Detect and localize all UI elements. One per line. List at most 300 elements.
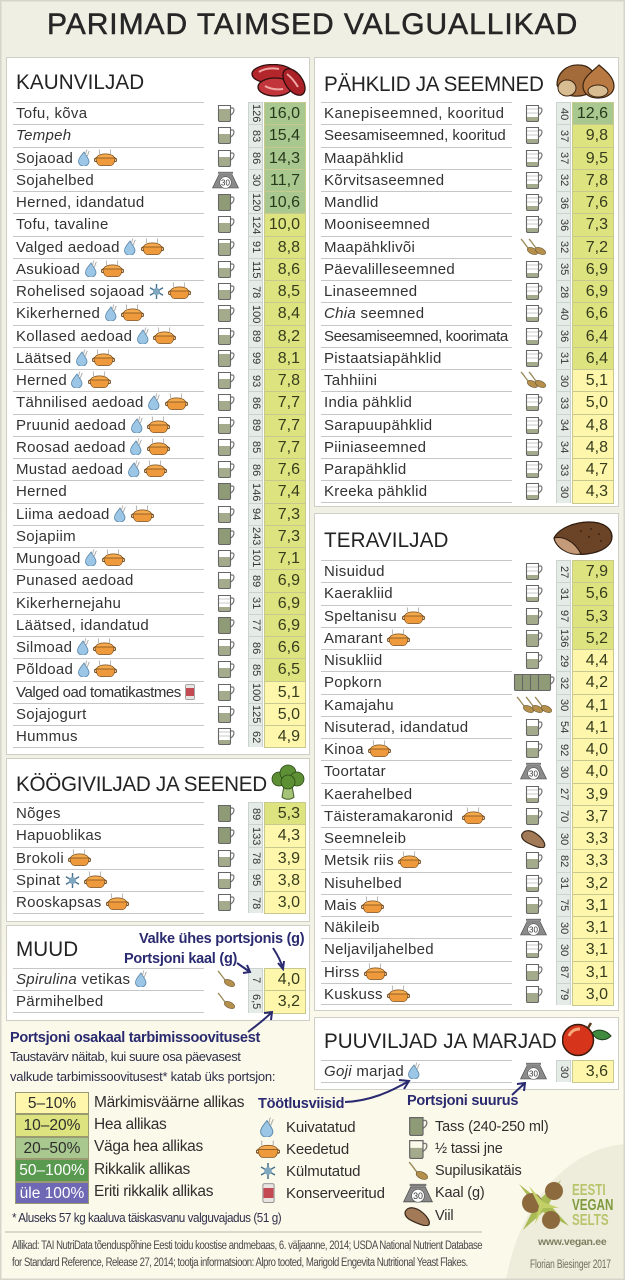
- row: Rohelised sojaoad: [13, 280, 306, 302]
- row: Täisteramakaronid: Täisteramakaronid: [324, 808, 453, 825]
- website: www.vegan.ee: [538, 1236, 606, 1248]
- row: Sojaoad: 14,3: [269, 150, 300, 166]
- panel: teraviljad: [315, 514, 618, 1010]
- row: Herned keedetud: Herned: [16, 372, 67, 389]
- title: PARIMAD TAIMSED VALGUALLIKAD: [47, 8, 578, 41]
- row: Chia seemned: [321, 302, 614, 324]
- row: Piiniaseemned: 34: [558, 441, 570, 454]
- row: Nõges: 5,3: [278, 805, 300, 822]
- row: Maapähklivõi: [321, 236, 614, 258]
- row: Kuskuss: Kuskuss: [324, 986, 383, 1003]
- row: Maapähklivõi: 7,2: [586, 238, 608, 256]
- panel: puuviljad ja marjad: [315, 1018, 618, 1089]
- logo text: [572, 1184, 613, 1228]
- row: Maapähklivõi: 32: [558, 241, 570, 253]
- row: Pistaatsiapähklid: 6,4: [586, 350, 608, 367]
- row: Valged aedoad: 8,8: [278, 238, 300, 256]
- row: Mooniseemned: 7,3: [586, 216, 608, 233]
- heading: kaunviljad: KAUNVILJAD: [16, 70, 144, 94]
- swatch 10–20%: 10–20%: [24, 1117, 80, 1134]
- row: Täisteramakaronid: [321, 805, 614, 827]
- row: Seemneleib: 3,3: [586, 830, 608, 847]
- label: Supilusikatäis: Supilusikatäis: [435, 1163, 522, 1179]
- row: Chia seemned: 6,6: [586, 305, 608, 322]
- row: Tofu, kõva: Tofu, kõva: [16, 105, 87, 122]
- swatch 20–50%: 20–50%: [24, 1140, 80, 1157]
- row: Kinoa: Kinoa: [324, 741, 364, 758]
- row: Põldoad: 85: [250, 664, 262, 676]
- row: Speltanisu: Speltanisu: [324, 608, 397, 624]
- row: Toortatar: 30: [558, 766, 570, 778]
- row: Kamajahu: Kamajahu: [324, 696, 394, 714]
- heading: teraviljad: TERAVILJAD: [324, 528, 448, 552]
- icon: canned: [262, 1183, 275, 1203]
- row: Kikerherned: 8,4: [278, 305, 300, 322]
- label: Konserveeritud: Konserveeritud: [286, 1185, 385, 1202]
- row: Sojaoad: Sojaoad: [16, 150, 73, 166]
- row: Liima aedoad: Liima aedoad: [16, 506, 110, 522]
- row: Mandlid: 7,6: [586, 194, 608, 211]
- heading: portsjoni suurus: Portsjoni suurus: [407, 1093, 518, 1109]
- row: Maapähklid: 37: [558, 152, 570, 164]
- row: Kinoa: 92: [558, 744, 570, 756]
- row: Tempeh: 83: [250, 130, 262, 142]
- icon: tablespoon: [408, 1161, 428, 1181]
- legend: processing methods: [255, 1115, 390, 1207]
- row: Mais: Mais: [324, 897, 357, 914]
- row: Hummus: 4,9: [278, 728, 300, 745]
- row: Läätsed, idandatud: 6,9: [278, 617, 300, 634]
- row: Asukioad: Asukioad: [16, 261, 80, 278]
- row: Maapähklid: 9,5: [586, 150, 608, 166]
- row: Kikerhernejahu: [13, 592, 306, 614]
- row: Hapuoblikas: [13, 824, 306, 847]
- row: Metsik riis: Metsik riis: [324, 852, 394, 869]
- row: Rooskapsas: 3,0: [278, 894, 300, 911]
- row: Chia seemned: Chia seemned: [324, 305, 424, 322]
- row: Kreeka pähklid: 30: [558, 486, 570, 498]
- row: Läätsed: 99: [250, 352, 262, 364]
- row: Valged oad tomatikastmes: 100: [250, 683, 262, 701]
- text: legend explanation: Taustavärv näitab, kui suure osa päevasest: [10, 1049, 240, 1064]
- heading: köögiviljad ja seened: KÖÖGIVILJAD JA SEENED: [16, 772, 267, 796]
- row: Seemneleib: [321, 827, 614, 849]
- row: Asukioad: 115: [250, 261, 262, 278]
- row: Seesamiseemned, kooritud: [321, 124, 614, 146]
- row: Kanepiseemned, kooritud: Kanepiseemned, kooritud: [324, 105, 504, 122]
- swatch 50–100%: 50–100%: [19, 1162, 85, 1179]
- row: Läätsed: 8,1: [278, 350, 300, 367]
- background blob: [500, 1140, 625, 1280]
- icon: dried: [260, 1117, 274, 1137]
- row: Kaerakliid: 5,6: [586, 585, 608, 602]
- row: Rohelised sojaoad: 78: [250, 286, 262, 298]
- row: Pistaatsiapähklid: [321, 347, 614, 369]
- row: Põldoad: 6,5: [278, 661, 300, 678]
- row: Kaerakliid: 31: [558, 588, 570, 600]
- sources: [12, 1238, 482, 1271]
- row: Piiniaseemned: 4,8: [586, 439, 608, 456]
- logo text: EESTI: [572, 1182, 606, 1199]
- row: Sarapuupähklid: 34: [558, 419, 570, 431]
- row: Linaseemned: Linaseemned: [324, 283, 417, 300]
- row: Kõrvitsaseemned: 32: [558, 174, 570, 186]
- row: Spinat: [13, 869, 306, 891]
- row: Sojapiim: [13, 525, 306, 547]
- row: Tähnilised aedoad: Tähnilised aedoad: [16, 394, 144, 411]
- row: Mais: [321, 894, 614, 916]
- row: Spinat: Spinat: [16, 872, 60, 889]
- label: valke ühes portsjonis: Valke ühes portsjonis (g): [139, 931, 304, 947]
- row: Neljaviljahelbed: 3,1: [586, 941, 608, 958]
- row: Kaerahelbed: [321, 782, 614, 805]
- row: Kõrvitsaseemned: Kõrvitsaseemned: [324, 172, 444, 189]
- row: Mungoad: 7,1: [278, 550, 300, 567]
- row: Nõges: 89: [250, 808, 262, 820]
- row: Goji marjad: 30: [558, 1066, 570, 1078]
- row: Päevalilleseemned: 35: [558, 263, 570, 276]
- row: Sarapuupähklid: [321, 414, 614, 436]
- row: Silmoad: [13, 636, 306, 658]
- row: Pruunid aedoad: Pruunid aedoad: [16, 416, 126, 434]
- row: Speltanisu: 5,3: [586, 608, 608, 624]
- row: Mooniseemned: 36: [558, 219, 570, 231]
- row: Nisuhelbed: 3,2: [586, 874, 608, 892]
- icon: apple: [562, 1021, 612, 1057]
- row: Tofu, kõva: [13, 102, 306, 124]
- row: Pärmihelbed: Pärmihelbed: [16, 993, 104, 1010]
- icon: beans: [251, 64, 306, 97]
- heading: muud: MUUD: [16, 937, 78, 961]
- row: Tähnilised aedoad: [13, 391, 306, 414]
- label: Kuivatatud: Kuivatatud: [286, 1119, 355, 1136]
- row: Tahhiini: Tahhiini: [324, 372, 377, 389]
- icon: cup: [408, 1116, 428, 1136]
- logo text: VEGAN: [572, 1197, 613, 1214]
- row: Spinat: 3,8: [278, 872, 300, 889]
- row: Tempeh: [13, 124, 306, 147]
- icon: hazelnuts: [556, 64, 615, 99]
- row: Kanepiseemned, kooritud: 40: [558, 108, 570, 120]
- row: Päevalilleseemned: 6,9: [586, 261, 608, 278]
- row: Valged oad tomatikastmes: [13, 681, 306, 703]
- row: Näkileib: Näkileib: [324, 919, 380, 936]
- credit: Florian Biesinger 2017: [530, 1259, 611, 1271]
- row: Neljaviljahelbed: [321, 938, 614, 960]
- row: Kamajahu: 30: [558, 699, 570, 711]
- footnote: * Aluseks 57 kg kaaluva täiskasvanu valguvajadus (51 g): [12, 1210, 281, 1225]
- row: Nisuhelbed: [321, 872, 614, 894]
- row: Sojajogurt: Sojajogurt: [16, 706, 87, 723]
- row: Hapuoblikas: 4,3: [278, 827, 300, 844]
- row: Popkorn: 32: [558, 677, 570, 689]
- sources: for Standard Reference, Release 27, 2014; tootja informatsioon: Alpro tooted, Marigold Engevita Nutritional Yeast Flakes.: [12, 1256, 468, 1268]
- row: Mungoad: [13, 547, 306, 569]
- row: Nisuidud: 7,9: [586, 563, 608, 580]
- row: Tempeh: Tempeh: [16, 127, 71, 144]
- row: Hummus: Hummus: [16, 728, 78, 745]
- label: Kaal: Kaal (g): [435, 1185, 485, 1201]
- row: Liima aedoad: 7,3: [278, 506, 300, 522]
- row: Punased aedoad: [13, 569, 306, 592]
- row: Brokoli: Brokoli: [16, 850, 64, 866]
- row: Näkileib: 30: [558, 922, 570, 934]
- row: Kamajahu: 4,1: [586, 696, 608, 714]
- row: Pärmihelbed: [13, 990, 306, 1014]
- row: Amarant: Amarant: [324, 630, 383, 647]
- row: Pruunid aedoad: [13, 414, 306, 436]
- row: Seesamiseemned, koorimata: [321, 324, 614, 347]
- label: Viil: Viil: [435, 1208, 453, 1224]
- row: Nisuhelbed: Nisuhelbed: [324, 874, 402, 892]
- row: Popkorn: Popkorn: [324, 674, 382, 691]
- row: Asukioad: [13, 258, 306, 280]
- row: Herned keedetud: [13, 369, 306, 391]
- swatch 5–10%: 5–10%: [28, 1095, 76, 1112]
- row: Silmoad: 86: [250, 642, 262, 654]
- swatch 5–10%: [15, 1092, 89, 1114]
- label üle 100%: Eriti rikkalik allikas: [94, 1183, 213, 1200]
- row: Mustad aedoad: Mustad aedoad: [16, 461, 123, 478]
- row: Herned toored: 146: [250, 483, 262, 501]
- row: Neljaviljahelbed: Neljaviljahelbed: [324, 941, 434, 958]
- text: legend explanation: valkude tarbimissoovitusest* katab üks portsjon:: [10, 1068, 275, 1084]
- panel: pähklid ja seemned: [315, 58, 618, 506]
- row: Hapuoblikas: Hapuoblikas: [16, 827, 102, 844]
- row: Nisuidud: [321, 560, 614, 582]
- row: Amarant: 136: [558, 629, 570, 648]
- row: Kikerherned: Kikerherned: [16, 305, 100, 322]
- row: Nisuterad, idandatud: [321, 716, 614, 738]
- row: Punased aedoad: 89: [250, 575, 262, 587]
- row: Kõrvitsaseemned: 7,8: [586, 172, 608, 189]
- row: Hirss: Hirss: [324, 964, 360, 980]
- icon: cooked: [256, 1140, 280, 1158]
- row: Spinat: 95: [250, 874, 262, 886]
- row: Roosad aedoad: [13, 436, 306, 458]
- row: Herned toored: 7,4: [278, 483, 300, 500]
- row: Spirulina vetikas: [13, 968, 306, 990]
- row: Herned, idandatud: Herned, idandatud: [16, 194, 145, 211]
- row: Nisukliid: 4,4: [586, 652, 608, 669]
- heading: töötlusviisid: Töötlusviisid: [258, 1096, 344, 1112]
- row: Piiniaseemned: Piiniaseemned: [324, 439, 426, 456]
- row: Kreeka pähklid: 4,3: [586, 483, 608, 500]
- swatch üle 100%: [15, 1182, 89, 1204]
- row: Sojaoad: 86: [250, 152, 262, 164]
- row: Brokoli: 78: [250, 852, 262, 864]
- row: Metsik riis: 82: [558, 855, 570, 867]
- row: Brokoli: [13, 847, 306, 869]
- row: Tähnilised aedoad: 7,7: [278, 394, 300, 411]
- row: Sojajogurt: 5,0: [278, 706, 300, 723]
- row: Hirss: [321, 960, 614, 983]
- row: Herned, idandatud: 120: [250, 193, 262, 212]
- row: Kollased aedoad: [13, 325, 306, 347]
- row: Herned, idandatud: 10,6: [269, 194, 300, 211]
- row: Päevalilleseemned: Päevalilleseemned: [324, 261, 455, 278]
- row: Mooniseemned: Mooniseemned: [324, 216, 430, 233]
- row: Kaerahelbed: 27: [558, 788, 570, 800]
- row: Mooniseemned: [321, 213, 614, 236]
- row: Sojahelbed: 11,7: [270, 172, 300, 189]
- row: Roosad aedoad: 7,7: [278, 439, 300, 456]
- row: Mungoad: 101: [250, 549, 262, 568]
- icon: frozen: [260, 1163, 276, 1179]
- panel: muud: [7, 926, 309, 1020]
- row: Tofu, tavaline: [13, 213, 306, 236]
- row: Tahhiini: 5,1: [586, 372, 608, 389]
- row: Mustad aedoad: 86: [250, 464, 262, 476]
- row: Kanepiseemned, kooritud: [321, 102, 614, 124]
- swatch üle 100%: üle 100%: [20, 1185, 84, 1202]
- label: Külmutatud: Külmutatud: [286, 1163, 360, 1180]
- row: Nisuterad, idandatud: Nisuterad, idandatud: [324, 719, 468, 736]
- row: Kuskuss: 3,0: [586, 986, 608, 1003]
- label: Keedetud: Keedetud: [286, 1141, 349, 1158]
- row: Kollased aedoad: Kollased aedoad: [16, 328, 132, 344]
- row: Nisuterad, idandatud: 4,1: [586, 719, 608, 736]
- row: Herned keedetud: 93: [250, 374, 262, 387]
- row: Sojahelbed: 30: [250, 174, 262, 186]
- row: Sarapuupähklid: Sarapuupähklid: [324, 416, 432, 434]
- logo: eesti vegan selts: [515, 1178, 615, 1234]
- row: Nisukliid: Nisukliid: [324, 652, 383, 669]
- icon: bread: [553, 521, 613, 556]
- row: Rooskapsas: [13, 891, 306, 914]
- row: Sojajogurt: 125: [250, 705, 262, 724]
- row: Kikerherned: [13, 302, 306, 325]
- row: India pähklid: 33: [558, 397, 570, 409]
- row: Speltanisu: [321, 604, 614, 627]
- row: Valged oad tomatikastmes: Valged oad tomatikastmes: [16, 684, 181, 700]
- row: Tofu, kõva: 16,0: [269, 105, 300, 122]
- row: Herned toored: [13, 480, 306, 503]
- row: Kreeka pähklid: [321, 480, 614, 502]
- row: Nisuterad, idandatud: 54: [558, 721, 570, 734]
- logo mark: [515, 1178, 571, 1232]
- row: Läätsed, idandatud: 77: [250, 619, 262, 632]
- row: Rooskapsas: Rooskapsas: [16, 894, 102, 911]
- row: Sojajogurt: [13, 703, 306, 725]
- label 20–50%: Väga hea allikas: [94, 1138, 203, 1155]
- label 10–20%: Hea allikas: [94, 1116, 167, 1133]
- row: Tempeh: 15,4: [269, 127, 300, 144]
- row: Valged aedoad: 91: [250, 241, 262, 253]
- row: Tofu, tavaline: Tofu, tavaline: [16, 216, 109, 233]
- row: Tahhiini: [321, 369, 614, 391]
- label 50–100%: Rikkalik allikas: [94, 1161, 190, 1178]
- row: Chia seemned: 40: [558, 308, 570, 320]
- row: Kuskuss: 79: [558, 988, 570, 1000]
- row: Mandlid: 36: [558, 196, 570, 209]
- row: Kinoa: 4,0: [586, 741, 608, 758]
- row: Tähnilised aedoad: 86: [250, 397, 262, 409]
- row: Mandlid: [321, 191, 614, 213]
- row: Mandlid: Mandlid: [324, 194, 379, 211]
- row: Kikerhernejahu: 31: [250, 597, 262, 609]
- row: Hummus: [13, 725, 306, 748]
- row: Maapähklid: Maapähklid: [324, 150, 404, 166]
- row: Nisuidud: Nisuidud: [324, 563, 385, 580]
- row: Piiniaseemned: [321, 436, 614, 458]
- row: Goji marjad: [321, 1060, 614, 1082]
- row: Tofu, tavaline: 10,0: [269, 216, 300, 233]
- row: Sarapuupähklid: 4,8: [586, 416, 608, 434]
- heading: puuviljad ja marjad: PUUVILJAD JA MARJAD: [324, 1029, 557, 1053]
- row: Päevalilleseemned: [321, 258, 614, 280]
- row: Kikerhernejahu: Kikerhernejahu: [16, 594, 121, 612]
- row: Valged aedoad: Valged aedoad: [16, 238, 120, 256]
- row: Goji marjad: Goji marjad: [324, 1063, 404, 1080]
- row: Liima aedoad: [13, 503, 306, 525]
- row: Põldoad: [13, 658, 306, 681]
- label: half cup: ½ tassi jne: [435, 1141, 503, 1157]
- row: Kaerakliid: Kaerakliid: [324, 585, 393, 602]
- row: Sojahelbed: [13, 169, 306, 191]
- row: Rohelised sojaoad: 8,5: [278, 283, 300, 300]
- row: Hummus: 62: [250, 730, 262, 743]
- row: Popkorn: 4,2: [586, 674, 608, 691]
- logo text: SELTS: [572, 1212, 609, 1229]
- row: Punased aedoad: Punased aedoad: [16, 572, 134, 589]
- row: Pruunid aedoad: 7,7: [278, 416, 300, 434]
- row: Spirulina vetikas: 7: [250, 977, 262, 983]
- panel: kaunviljad: [7, 58, 309, 754]
- row: Parapähklid: Parapähklid: [324, 461, 407, 478]
- row: Pruunid aedoad: 89: [250, 419, 262, 431]
- row: Mais: 75: [558, 899, 570, 912]
- row: Täisteramakaronid: 3,7: [586, 808, 608, 825]
- row: Läätsed, idandatud: Läätsed, idandatud: [16, 617, 149, 634]
- icon: half cup: [408, 1139, 428, 1159]
- row: Roosad aedoad: 85: [250, 441, 262, 454]
- row: Sojapiim: Sojapiim: [16, 528, 76, 545]
- legend: portion sizes: [400, 1115, 540, 1227]
- row: Linaseemned: 28: [558, 286, 570, 298]
- row: Seemneleib: Seemneleib: [324, 830, 406, 847]
- row: Spirulina vetikas: Spirulina vetikas: [16, 971, 130, 988]
- row: Toortatar: 4,0: [586, 763, 608, 780]
- icon: scale: [403, 1183, 433, 1203]
- row: Valged aedoad: [13, 236, 306, 258]
- row: Parapähklid: 4,7: [586, 461, 608, 478]
- row: Speltanisu: 97: [558, 610, 570, 622]
- row: Tofu, tavaline: 124: [250, 216, 262, 234]
- row: Rohelised sojaoad: Rohelised sojaoad: [16, 283, 145, 300]
- row: Parapähklid: 33: [558, 464, 570, 476]
- row: Punased aedoad: 6,9: [278, 572, 300, 589]
- text: legend explanation: [10, 1047, 275, 1086]
- row: Nisukliid: [321, 649, 614, 671]
- row: Kaerakliid: [321, 582, 614, 604]
- row: Nõges: Nõges: [16, 805, 61, 822]
- row: Nisukliid: 29: [558, 654, 570, 667]
- row: Popkorn: [321, 671, 614, 694]
- legend: colour scale: [0, 1092, 250, 1205]
- row: Pistaatsiapähklid: Pistaatsiapähklid: [324, 350, 442, 367]
- row: Metsik riis: [321, 849, 614, 872]
- swatch 20–50%: [15, 1137, 89, 1159]
- row: Parapähklid: [321, 458, 614, 480]
- row: Seesamiseemned, koorimata: 6,4: [586, 328, 608, 344]
- row: India pähklid: [321, 391, 614, 414]
- row: Linaseemned: 6,9: [586, 283, 608, 300]
- row: Silmoad: Silmoad: [16, 639, 72, 656]
- row: Nisuidud: 27: [558, 566, 570, 578]
- row: Herned, idandatud: [13, 191, 306, 213]
- row: Kamajahu: [321, 694, 614, 716]
